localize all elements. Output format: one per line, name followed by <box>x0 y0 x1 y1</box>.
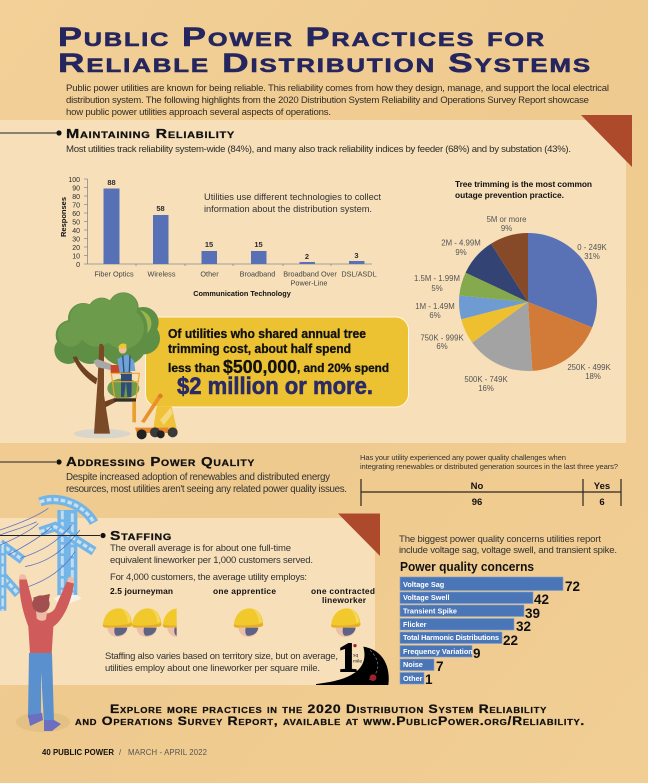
footer call to action: Explore more practices in the 2020 Distribution System Reliability <box>110 702 547 716</box>
text: technologies: information about the distribution system. <box>204 204 372 214</box>
bar chart: power quality concerns: Frequency Variation <box>403 647 473 656</box>
survey question: Has your utility experienced any power quality challenges when <box>360 453 566 462</box>
text: power quality concerns: include voltage sag, voltage swell, and transient spike. <box>399 545 617 556</box>
page footer: 40 PUBLIC POWER <box>42 748 114 757</box>
text: technologies: Utilities use different technologies to collect <box>204 192 381 202</box>
pie chart: tree trimming cost: 1.5M - 1.99M <box>414 274 460 283</box>
bar chart: power quality concerns: 7 <box>436 659 444 674</box>
title: Reliable Distribution Systems <box>58 48 592 78</box>
bar chart: communication technology: Fiber Optics <box>94 270 134 278</box>
intro text: how public power utilities approach several aspects of operations. <box>66 107 331 118</box>
bar chart: power quality concerns: Noise <box>403 660 423 669</box>
text: staffing average <box>110 543 313 583</box>
title <box>58 22 592 78</box>
connector line: staffing <box>0 533 106 538</box>
pie chart: tree trimming cost: 9% <box>501 224 512 233</box>
callout: tree trimming cost <box>146 317 408 407</box>
bar chart: power quality concerns: 42 <box>534 592 549 607</box>
bar chart: communication technology: Broadband Over <box>283 270 337 278</box>
bar chart: communication technology: 70 <box>72 202 80 210</box>
bar chart: communication technology: Wireless <box>148 270 176 278</box>
footer call to action <box>75 702 585 728</box>
bar chart: power quality concerns: 9 <box>473 646 481 661</box>
text: power quality concerns: The biggest power quality concerns utilities report <box>399 534 601 545</box>
text: territory: utilities employ about one lineworker per square mile. <box>105 663 320 674</box>
bar chart: communication technology <box>59 177 377 298</box>
callout: tree trimming cost: $2 million or more. <box>177 373 373 400</box>
bar chart: power quality concerns: Transient Spike <box>403 606 457 616</box>
labels: lineworker types: one contracted <box>311 586 375 596</box>
pie chart: tree trimming cost: 18% <box>585 372 601 381</box>
bar chart: power quality concerns: 22 <box>503 633 518 648</box>
table: no vs yes: 96 <box>472 497 482 508</box>
labels: lineworker types: 2.5 journeyman <box>110 586 173 596</box>
bar chart: communication technology: Power-Line <box>291 278 327 288</box>
bar chart: communication technology: 40 <box>72 228 80 235</box>
bar chart: communication technology: DSL/ASDL <box>341 270 377 278</box>
pie chart: tree trimming cost: 6% <box>429 311 441 320</box>
text: technologies <box>204 192 381 214</box>
illustration: transmission towers <box>0 500 94 611</box>
illustration: tree and worker in lift <box>54 292 178 439</box>
corner triangle: staffing <box>338 514 380 556</box>
text: power quality <box>66 472 347 495</box>
text: territory: Staffing also varies based on territory size, but on average, <box>105 651 338 662</box>
callout: tree trimming cost: , and 20% spend <box>297 363 389 375</box>
pie chart: tree trimming cost <box>414 215 611 393</box>
table: no vs yes <box>361 479 621 508</box>
bar chart: communication technology: Other <box>200 270 219 278</box>
table: no vs yes: 6 <box>599 497 605 508</box>
bar chart: communication technology: Broadband <box>240 270 275 278</box>
heading: addressing power quality: Addressing Power Quality <box>66 454 255 469</box>
text: territory <box>105 651 338 674</box>
table: no vs yes: No <box>471 481 484 492</box>
bar chart: power quality concerns: 39 <box>525 606 540 621</box>
bar chart: communication technology: 10 <box>72 254 80 260</box>
pie chart: tree trimming cost: 2M - 4.99M <box>441 238 481 248</box>
bar chart: power quality concerns: Voltage Sag <box>403 580 444 589</box>
page footer <box>42 748 207 757</box>
bar chart: power quality concerns: Voltage Swell <box>403 593 450 602</box>
bar chart: communication technology: 88 <box>107 178 116 187</box>
text: power quality: resources, most utilities aren't seeing any related power quality issues. <box>66 484 347 495</box>
bar chart: power quality concerns: Other <box>403 674 423 683</box>
heading: maintaining reliability <box>0 126 235 141</box>
text: power quality concerns <box>399 534 617 556</box>
labels: lineworker types: lineworker <box>322 595 367 605</box>
pie heading: Tree trimming is the most common <box>455 179 592 189</box>
bar chart: power quality concerns: Total Harmonic Distributions <box>403 633 499 642</box>
bar chart: communication technology: 15 <box>205 240 213 249</box>
panel: maintaining reliability <box>0 120 626 443</box>
pie chart: tree trimming cost: 31% <box>584 252 600 261</box>
bar chart: power quality concerns: 1 <box>425 672 433 687</box>
pie heading <box>455 179 592 200</box>
bar chart: communication technology: 80 <box>72 194 80 201</box>
callout: tree trimming cost: Of utilities who shared annual tree <box>168 327 366 341</box>
pie chart: tree trimming cost: 0 - 249K <box>577 243 608 252</box>
pie chart: tree trimming cost: 5M or more <box>487 215 526 224</box>
bar chart: communication technology: Responses <box>59 197 68 237</box>
pie chart: tree trimming cost: 16% <box>478 384 494 393</box>
bar chart: communication technology: 100 <box>68 177 80 184</box>
icon: one square mile road: mile <box>353 659 362 665</box>
pie chart: tree trimming cost: 9% <box>455 248 467 257</box>
pie chart: tree trimming cost: 250K - 499K <box>567 363 611 372</box>
survey question <box>360 453 618 471</box>
icon: one square mile road: sq <box>353 653 358 659</box>
heading: power quality concerns: Power quality concerns <box>400 559 534 574</box>
pie chart: tree trimming cost: 6% <box>436 342 448 351</box>
text: reliability tracking: Most utilities track reliability system-wide (84%), and many also track reliability indices by feeder (68%) and by substation (43%). <box>66 144 571 155</box>
callout: tree trimming cost: less than <box>168 363 220 375</box>
illustration: person <box>16 574 74 732</box>
panel: staffing <box>0 518 375 685</box>
text: staffing average: The overall average is for about one full-time <box>110 543 291 554</box>
page footer: MARCH - APRIL 2022 <box>128 748 207 757</box>
intro text: distribution system. The following highlights from the 2020 Distribution System Reliability and Operations Survey Report showcase <box>66 95 589 106</box>
text: power quality: Despite increased adoption of renewables and distributed energy <box>66 472 330 483</box>
icon: one square mile road: 1 <box>337 636 358 682</box>
intro text: Public power utilities are known for being reliable. This reliability comes from how they design, manage, and support the local electrical <box>66 83 609 94</box>
pie chart: tree trimming cost: 1M - 1.49M <box>415 302 455 311</box>
bar chart: communication technology: 60 <box>72 211 80 218</box>
corner triangle: maintaining reliability <box>581 115 632 167</box>
heading: addressing power quality <box>0 454 255 469</box>
icon: one square mile road <box>316 636 389 685</box>
footer call to action: and Operations Survey Report, available at www.PublicPower.org/Reliability. <box>75 714 585 728</box>
callout: tree trimming cost: trimming cost, about half spend <box>168 342 351 356</box>
bar chart: communication technology: 50 <box>72 220 80 226</box>
bar chart: communication technology: 30 <box>72 236 80 244</box>
bar chart: communication technology: Communication Technology <box>193 289 292 298</box>
bar chart: power quality concerns <box>400 577 580 687</box>
bar chart: power quality concerns: 32 <box>516 619 531 634</box>
bar chart: communication technology: 2 <box>305 252 309 261</box>
intro text <box>66 83 609 118</box>
bar chart: communication technology: 58 <box>156 204 165 213</box>
page footer: / <box>119 748 122 757</box>
labels: lineworker types <box>110 586 375 605</box>
table: no vs yes: Yes <box>594 481 610 492</box>
pie heading: outage prevention practice. <box>455 190 564 200</box>
bar chart: communication technology: 15 <box>254 240 263 249</box>
text: staffing average: equivalent lineworker per 1,000 customers served. <box>110 555 313 566</box>
labels: lineworker types: one apprentice <box>213 586 276 596</box>
bar chart: communication technology: 3 <box>354 251 359 260</box>
icons: hard hats <box>103 608 360 637</box>
bar chart: power quality concerns: 72 <box>565 579 580 594</box>
bar chart: power quality concerns: Flicker <box>403 620 427 629</box>
heading: staffing: Staffing <box>110 528 172 543</box>
text: staffing average: For 4,000 customers, the average utility employs: <box>110 572 307 583</box>
title: Public Power Practices for <box>58 22 546 52</box>
bar chart: communication technology: 90 <box>72 186 80 192</box>
survey question: integrating renewables or distributed generation sources in the last three years? <box>360 462 618 471</box>
bar chart: communication technology: 0 <box>76 262 80 269</box>
heading: maintaining reliability: Maintaining Reliability <box>66 126 235 141</box>
pie chart: tree trimming cost: 500K - 749K <box>464 375 508 384</box>
bar chart: communication technology: 20 <box>72 245 80 252</box>
callout: tree trimming cost: $500,000 <box>223 357 297 377</box>
pie chart: tree trimming cost: 5% <box>431 284 443 293</box>
pie chart: tree trimming cost: 750K - 999K <box>420 334 464 342</box>
